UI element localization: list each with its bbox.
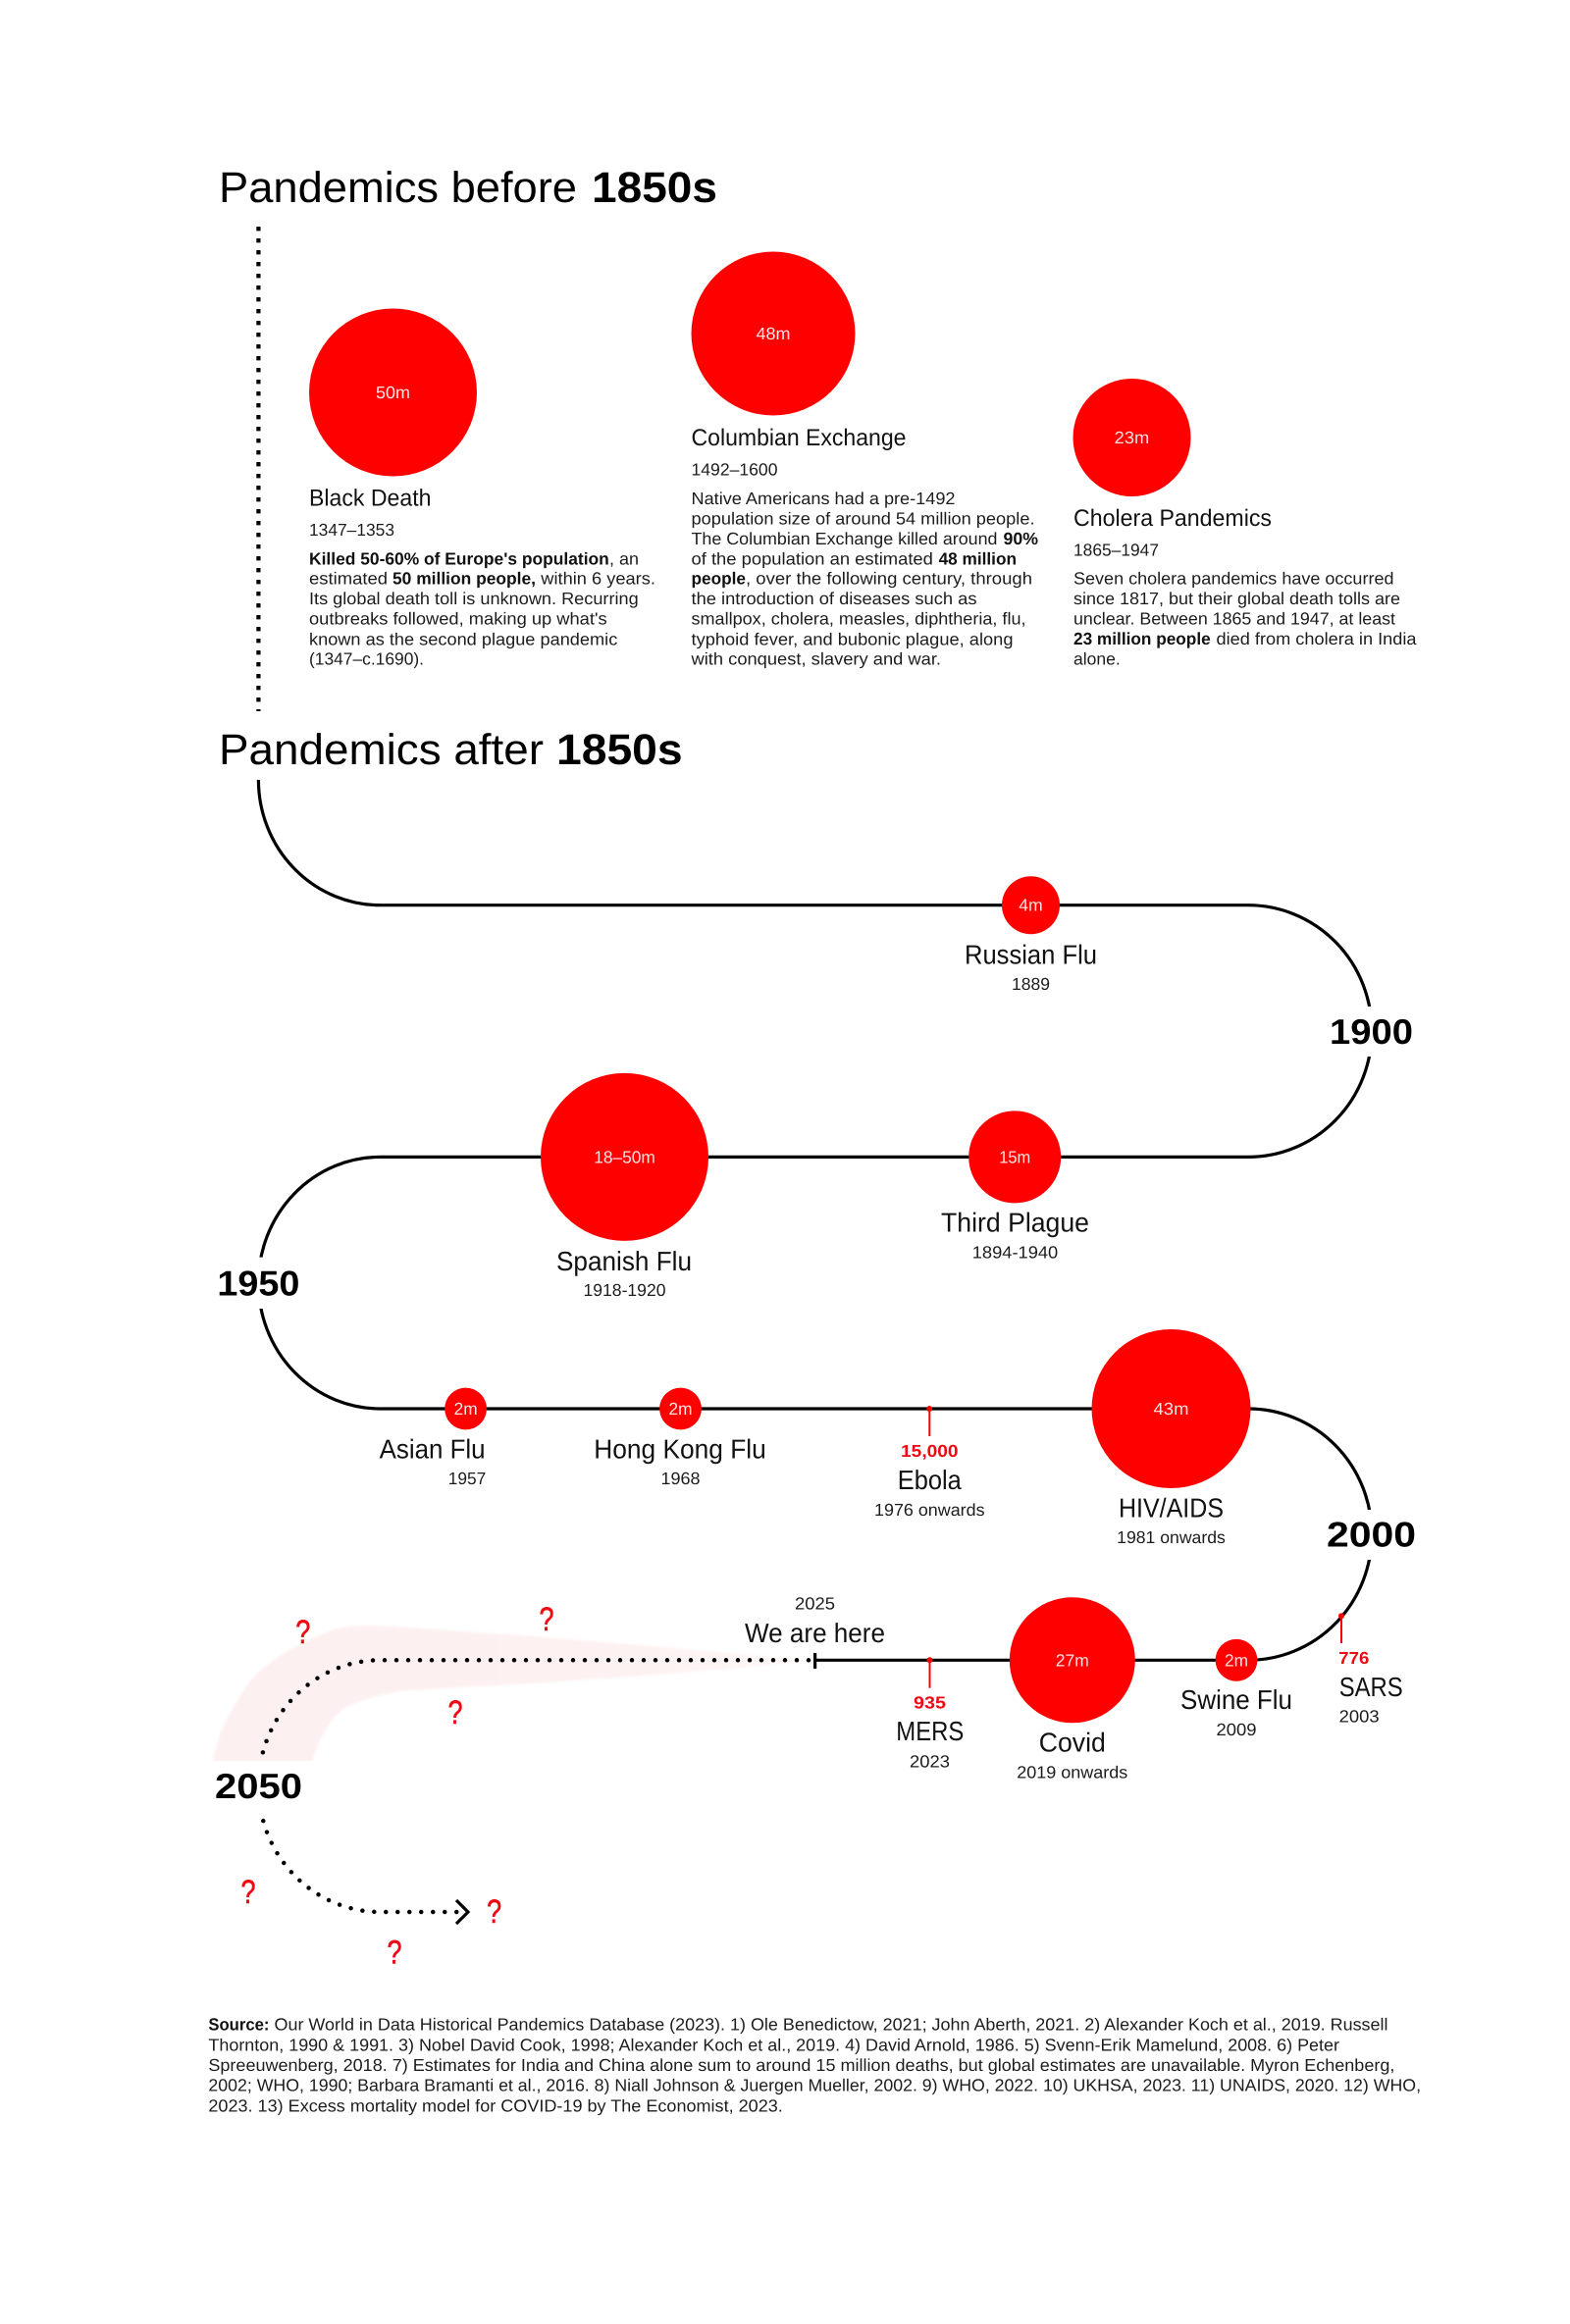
label: we are here 2025 [745,1594,885,1648]
bubble: Cholera 23m [1073,379,1191,496]
text block: Columbian Exchange description: , over the following century, through [746,569,1032,589]
text block: Black Death description: outbreaks followed, making up what's [309,609,607,629]
text block: Columbian Exchange description: population size of around 54 million people. [691,509,1034,529]
text block: Columbian Exchange description: 48 million [939,549,1017,569]
text block: Columbian Exchange description: with conquest, slavery and war. [690,648,941,668]
event: Third Plague [941,1110,1089,1262]
arrow head [456,1900,468,1924]
event: Swine Flu [1180,1639,1292,1739]
panel: Columbian Exchange [690,251,1038,668]
event: Asian Flu: Asian Flu [380,1434,486,1465]
panel: Black Death [309,308,655,668]
text block: Cholera description: 23 million people [1073,629,1211,648]
dotted future path to 2050 [258,1660,809,1786]
text block: Columbian Exchange description: the introduction of diseases such as [691,589,977,608]
event: Russian Flu: 1889 [1012,974,1050,994]
event: HIV/AIDS: 43m [1154,1399,1189,1419]
event: SARS: 2003 [1339,1707,1380,1727]
dates: Columbian Exchange: 1492–1600 [691,459,778,479]
event: Spanish Flu: 18–50m [594,1147,655,1166]
event: Spanish Flu: 1918-1920 [583,1280,666,1300]
year label: 1900: 1900 [1330,1011,1413,1052]
event: SARS [1338,1613,1403,1727]
event: SARS: 776 [1338,1648,1370,1668]
heading: pandemics before 1850s [219,164,717,212]
text block: Columbian Exchange description: 90% [1003,529,1038,548]
event: Ebola: 15,000 [901,1441,959,1461]
event: Swine Flu: 2m [1225,1650,1248,1670]
question marks: ? [295,1614,310,1651]
text block: Columbian Exchange description: of the population an estimated [691,549,933,569]
event: Asian Flu [380,1388,487,1488]
event: Covid: Covid [1039,1728,1106,1758]
event: Hong Kong Flu: Hong Kong Flu [594,1434,766,1465]
bubble: Black Death 50m: 50m [376,383,410,402]
text block: Cholera description: alone. [1073,648,1121,668]
event: HIV/AIDS [1091,1329,1250,1547]
bubble: Black Death 50m [309,308,477,477]
heading: pandemics before 1850s: Pandemics before [219,164,577,212]
text block: Columbian Exchange description: people [691,569,746,589]
serpentine timeline [258,780,1372,1660]
event: Swine Flu: 2009 [1217,1720,1256,1739]
question marks: ? [487,1893,501,1931]
text block: Cholera description: Seven cholera pandemics have occurred [1073,569,1393,589]
bubble: Cholera 23m: 23m [1115,428,1149,447]
text block: Columbian Exchange description: smallpox, cholera, measles, diphtheria, flu, [691,609,1026,629]
tick: we are here [813,1653,816,1669]
text block: Black Death description: 50 million people, [392,569,536,589]
event: Hong Kong Flu [594,1388,766,1488]
question marks [241,1601,553,1972]
text block: Black Death description: Its global death toll is unknown. Recurring [309,589,639,608]
text block: Black Death description: , an [609,549,639,569]
bubble: Columbian Exchange 48m [691,251,856,416]
event: Russian Flu: Russian Flu [965,940,1097,969]
text block: Columbian Exchange description: typhoid fever, and bubonic plague, along [691,629,1013,648]
year label: 2050: 2050 [215,1766,302,1806]
event: MERS [896,1657,964,1772]
text block: Columbian Exchange description [690,489,1038,668]
event: Third Plague: 15m [999,1147,1030,1166]
event: Russian Flu: 4m [1019,896,1043,915]
label: we are here 2025: 2025 [795,1594,835,1614]
text block: Columbian Exchange description: Native Americans had a pre-1492 [691,489,956,508]
event: Hong Kong Flu: 2m [669,1399,693,1419]
source note: 2023. 13) Excess mortality model for COVID-19 by The Economist, 2023. [208,2095,783,2115]
year label: 1950: 1950 [217,1263,299,1303]
event: MERS: MERS [896,1716,964,1746]
event: Asian Flu: 1957 [448,1469,486,1488]
text block: Black Death description [309,549,655,668]
text block: Black Death description: estimated [309,569,388,589]
text block: Cholera description: died from cholera in India [1217,629,1417,648]
heading: pandemics after 1850s: Pandemics after [219,726,544,774]
text block: Cholera description: unclear. Between 1865 and 1947, at least [1073,609,1395,629]
event: MERS: 2023 [910,1752,950,1772]
source note: Spreeuwenberg, 2018. 7) Estimates for India and China alone sum to around 15 million deaths, but global estimates are unavailable. Myron Echenberg, [208,2055,1394,2075]
question marks: ? [241,1874,255,1911]
dotted timeline before 1850s [256,227,260,711]
event: Covid [1010,1597,1135,1782]
text block: Cholera description: since 1817, but their global death tolls are [1073,589,1400,608]
source note: Our World in Data Historical Pandemics Database (2023). 1) Ole Benedictow, 2021; John Aberth, 2021. 2) Alexander Koch et al., 2019. Russell [275,2014,1387,2034]
panel: Cholera Pandemics [1073,379,1417,668]
text block: Black Death description: Killed 50-60% of Europe's population [309,549,609,569]
event: SARS: SARS [1339,1672,1403,1702]
heading: pandemics before 1850s: 1850s [592,164,717,212]
event: Covid: 27m [1056,1650,1089,1670]
source note: 2002; WHO, 1990; Barbara Bramanti et al., 2016. 8) Niall Johnson & Juergen Mueller, 2002. 9) WHO, 2022. 10) UKHSA, 2023. 11) UNAIDS, 2020. 12) WHO, [208,2076,1421,2095]
question marks: ? [540,1601,553,1638]
event: Hong Kong Flu: 1968 [661,1469,701,1488]
event: Spanish Flu [541,1073,708,1300]
event: Covid: 2019 onwards [1017,1763,1128,1782]
event: Ebola: 1976 onwards [874,1500,985,1520]
text block: Black Death description: known as the second plague pandemic [309,629,618,648]
name: Black Death: Black Death [309,485,432,511]
year label: 2000: 2000 [1327,1515,1416,1555]
label: we are here 2025: We are here [745,1618,885,1648]
heading: pandemics after 1850s [219,726,683,774]
text block: Cholera description [1073,569,1417,668]
uncertainty band: future [213,1626,811,1763]
event: HIV/AIDS: HIV/AIDS [1119,1493,1224,1524]
text block: Columbian Exchange description: The Columbian Exchange killed around [691,529,997,548]
event: Third Plague: Third Plague [941,1208,1089,1238]
name: Cholera Pandemics: Cholera Pandemics [1073,505,1272,532]
question marks: ? [387,1935,402,1972]
event: MERS: 935 [914,1693,946,1713]
event: Spanish Flu: Spanish Flu [556,1246,692,1276]
event: Third Plague: 1894-1940 [972,1242,1059,1262]
event: Ebola [874,1406,985,1520]
dates: Black Death: 1347–1353 [309,520,394,540]
source note: Source: [208,2014,269,2034]
event: Asian Flu: 2m [454,1399,478,1419]
event: Swine Flu: Swine Flu [1180,1684,1292,1715]
name: Columbian Exchange: Columbian Exchange [691,425,907,451]
bubble: Columbian Exchange 48m: 48m [756,324,791,343]
dotted future path after 2050 [258,1786,467,1912]
event: Ebola: Ebola [898,1465,962,1495]
source note: Thornton, 1990 & 1991. 3) Nobel David Cook, 1998; Alexander Koch et al., 2019. 4) David Arnold, 1986. 5) Svenn-Erik Mamelund, 2008. 6) Peter [208,2036,1339,2055]
event: HIV/AIDS: 1981 onwards [1117,1527,1226,1547]
text block: Black Death description: (1347–c.1690). [309,648,424,668]
event: Russian Flu [965,876,1097,994]
source note [208,2014,1421,2115]
question marks: ? [447,1694,463,1731]
heading: pandemics after 1850s: 1850s [556,726,683,774]
dates: Cholera Pandemics: 1865–1947 [1073,541,1159,560]
text block: Black Death description: within 6 years. [540,569,655,589]
